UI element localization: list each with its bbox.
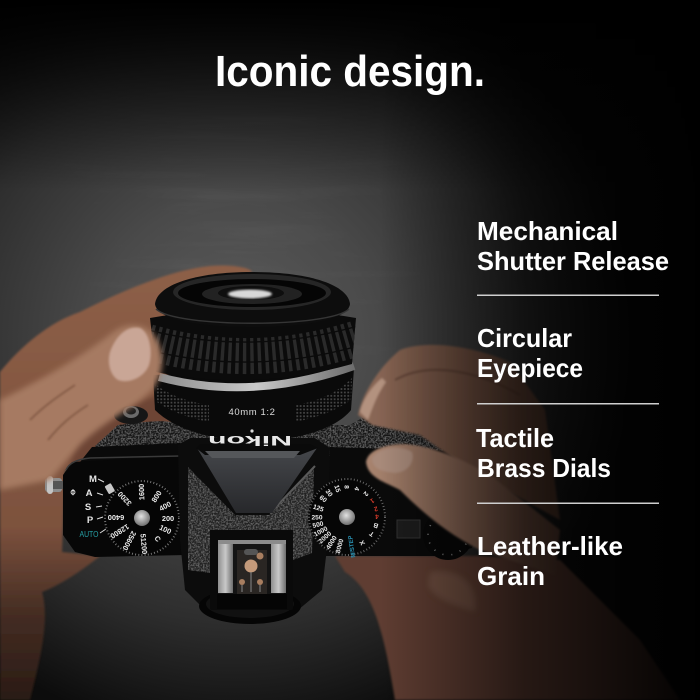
shutter speed dial: 4000: [325, 535, 339, 551]
feature: leather-like grain: [477, 531, 623, 591]
shutter speed dial: 2: [373, 504, 378, 512]
feature: tactile brass dials: [476, 423, 611, 483]
strap lug: [45, 476, 63, 494]
shutter speed dial: 1000: [313, 525, 329, 539]
ISO dial: 6400: [108, 513, 124, 522]
shutter speed dial: B: [372, 521, 379, 529]
hot shoe: [210, 530, 293, 610]
title: Iconic design.: [215, 47, 485, 96]
shutter speed dial: M/STEP: [348, 535, 357, 558]
upper body strip with leather grain: [95, 418, 500, 470]
shutter speed dial: 500: [312, 520, 325, 530]
feature: leather-like grain: Grain: [477, 561, 545, 591]
feature: mechanical shutter release: [477, 216, 669, 276]
lens label: 40mm 1:2: [228, 407, 276, 418]
ISO dial: 200: [162, 514, 174, 523]
shutter speed dial: 125: [312, 504, 325, 514]
ISO dial: 12800: [109, 522, 131, 541]
right index finger over the grip: [358, 345, 560, 520]
lens front opening: [173, 274, 331, 310]
shutter speed dial: X: [358, 538, 367, 546]
feature: mechanical shutter release: Mechanical: [477, 216, 618, 246]
left thumbnail: [109, 327, 151, 381]
left top plate: [63, 456, 186, 557]
left thumb on lens: [0, 325, 162, 490]
background: dark brushed surface: [0, 38, 578, 700]
mode dial labels: ⌽: [70, 487, 76, 498]
exposure compensation dial, right: [397, 510, 473, 560]
ISO dial: 25600: [121, 530, 138, 552]
shutter speed dial: 8: [342, 485, 350, 489]
shutter speed dial: 30: [324, 488, 334, 499]
shutter speed dial: 4: [352, 486, 360, 492]
shutter speed dial: 8000: [335, 538, 346, 554]
shutter speed dial: T: [368, 529, 376, 537]
mode dial labels: S: [85, 502, 91, 513]
right thumb on shutter dial: [366, 444, 560, 575]
lens base ring: [153, 368, 354, 441]
right hand: lower palm behind the camera: [335, 556, 680, 700]
ISO dial: 1600: [137, 484, 146, 500]
central viewfinder housing: [178, 438, 330, 610]
feature: circular eyepiece: Circular: [477, 323, 572, 353]
shutter speed dial: 15: [332, 484, 341, 494]
prism top: [197, 448, 317, 513]
ISO dial: 100: [158, 523, 173, 536]
feature: tactile brass dials: Brass Dials: [477, 453, 611, 483]
shutter speed dial: 2: [361, 490, 369, 497]
left hand: palm and fingers behind the camera: [0, 265, 252, 700]
Nikon logo, upside down: Nikon: [208, 433, 292, 449]
shutter button: left top knob: [114, 406, 148, 424]
ISO dial: C: [152, 534, 163, 544]
shutter speed dial: 1: [368, 496, 375, 504]
knurled base bands: [155, 384, 209, 422]
eyepiece: circular, bottom: [199, 588, 301, 624]
dark overlay on right side: [380, 0, 700, 700]
lens: [148, 272, 358, 441]
silver ring: [159, 366, 354, 387]
ISO dial: 51200: [138, 533, 149, 555]
camera body: [45, 272, 500, 624]
shutter speed dial: 60: [318, 494, 328, 505]
shutter speed dial: [308, 478, 386, 558]
right thumbnail: [372, 448, 413, 473]
side indicator: [181, 513, 186, 520]
ISO dial: 400: [158, 499, 173, 513]
focus grip ring: [150, 309, 356, 380]
ISO dial: [104, 480, 180, 556]
feature: circular eyepiece: Eyepiece: [477, 353, 583, 383]
mode dial labels: [70, 474, 115, 539]
shutter speed dial: 250: [311, 514, 323, 522]
feature list: [476, 216, 669, 591]
mode dial labels: A: [86, 488, 93, 499]
shutter speed dial: 4: [375, 512, 379, 520]
lens front barrel: [155, 272, 350, 327]
mode dial labels: M: [89, 474, 97, 485]
feature: circular eyepiece: [477, 323, 583, 383]
feature: leather-like grain: Leather-like: [477, 531, 623, 561]
shutter speed dial: 2000: [318, 530, 333, 545]
feature: tactile brass dials: Tactile: [476, 423, 554, 453]
right top plate: [310, 456, 480, 556]
ISO dial: 800: [149, 489, 164, 504]
feature: mechanical shutter release: Shutter Release: [477, 246, 669, 276]
mode dial labels: AUTO: [80, 529, 99, 539]
mode dial labels: P: [87, 515, 94, 526]
leather grain panels: [188, 466, 315, 573]
ISO dial: 3200: [116, 490, 134, 508]
